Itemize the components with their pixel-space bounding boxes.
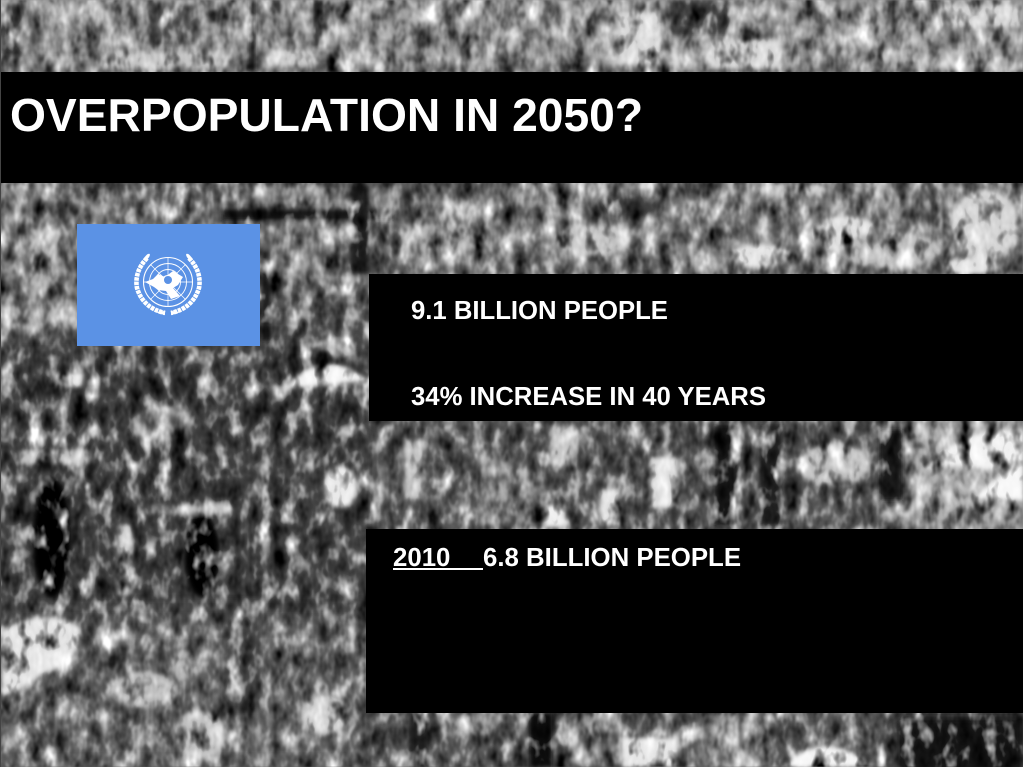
wreath bbox=[136, 258, 200, 313]
panel: 2010 population bbox=[366, 529, 1023, 713]
stat: 2010 population: 6.8 BILLION PEOPLE bbox=[483, 544, 741, 572]
panel: 2050 projection bbox=[369, 274, 1023, 421]
flag: United Nations bbox=[77, 224, 260, 346]
title: OVERPOPULATION IN 2050? bbox=[10, 89, 643, 141]
icon: UN emblem bbox=[136, 253, 200, 315]
title banner bbox=[1, 72, 1023, 183]
stat: increase: 34% INCREASE IN 40 YEARS bbox=[411, 383, 766, 411]
stat: population: 9.1 BILLION PEOPLE bbox=[411, 297, 668, 325]
stat: 2010 population: 2010 bbox=[393, 544, 450, 572]
